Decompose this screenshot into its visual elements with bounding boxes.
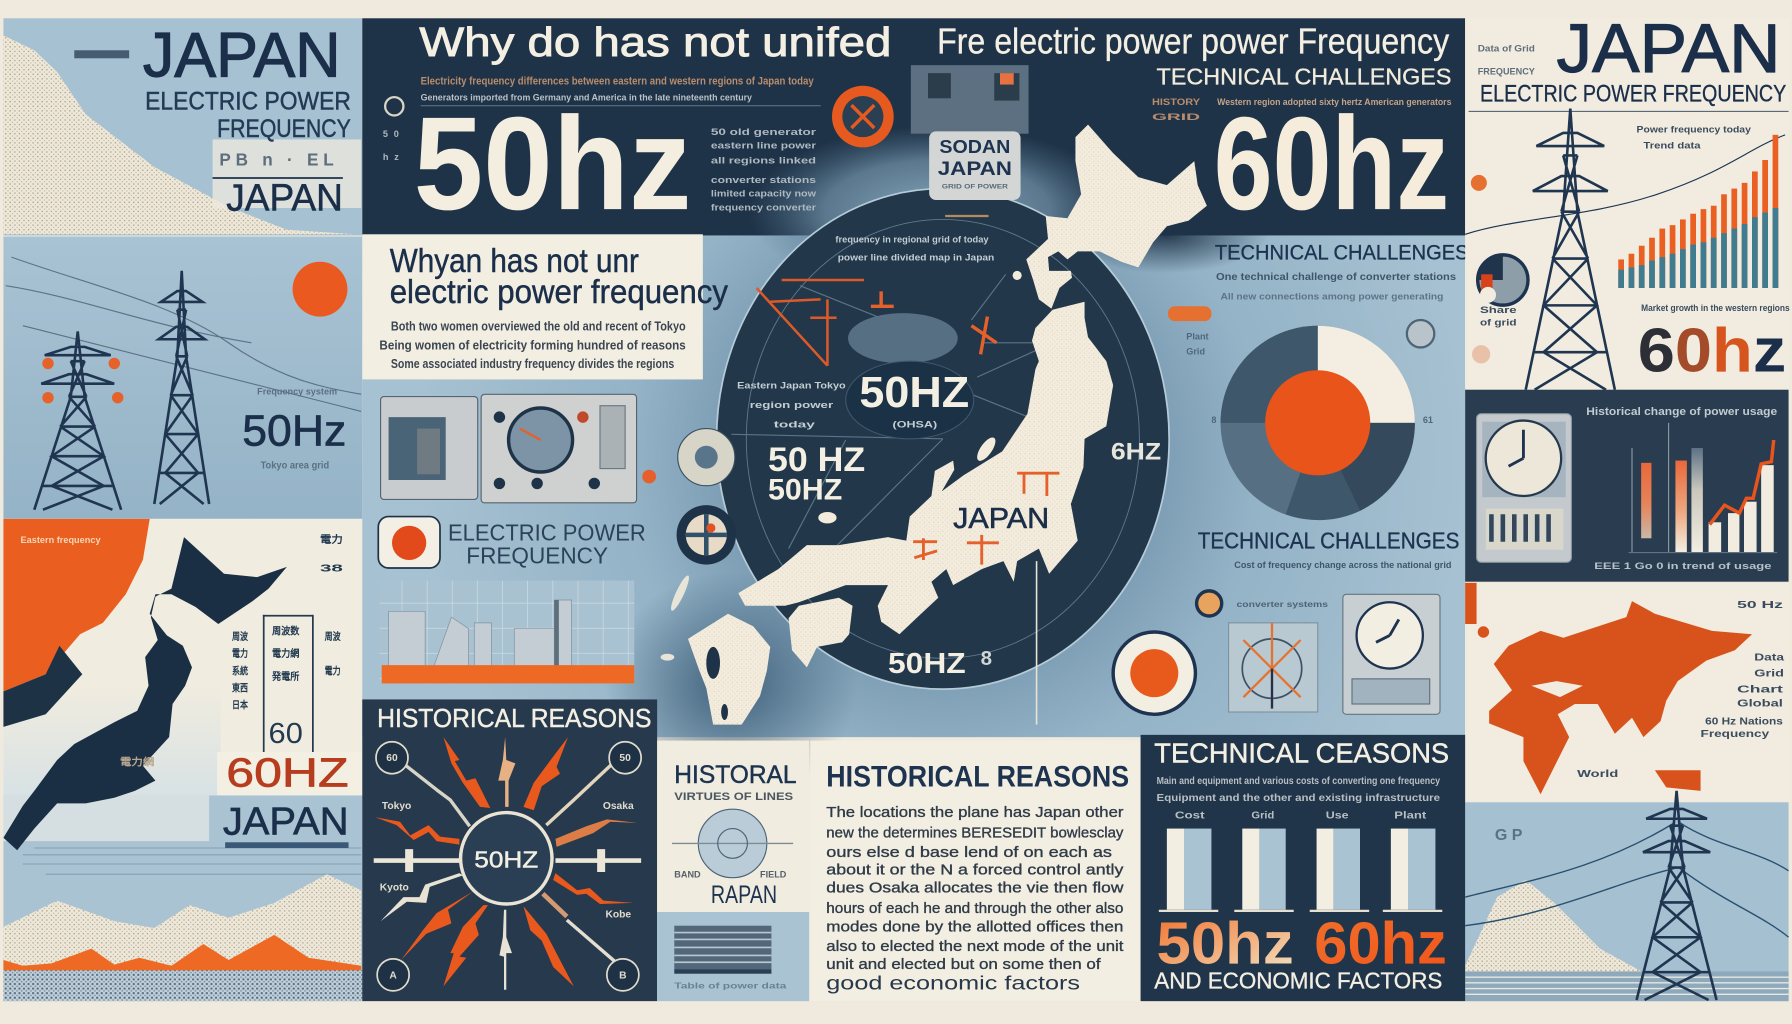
heading: electric power: ELECTRIC POWER — [145, 88, 351, 116]
fine print: One technical challenge of converter stations — [1216, 272, 1456, 283]
body lines: Being women of electricity forming hundred of reasons — [379, 339, 686, 353]
fine print in circle: region power — [750, 400, 834, 410]
small labels around pie: 8 — [1211, 415, 1217, 425]
photo tile — [911, 65, 1029, 134]
vertical text columns: 周波 — [325, 630, 341, 643]
Kyushu — [688, 614, 770, 725]
subheading: technical challenges: TECHNICAL CHALLENGES — [1157, 64, 1451, 90]
side notes: Western region adopted sixty hertz American generators — [1217, 97, 1451, 107]
Shikoku — [789, 598, 853, 667]
big number: 60hz: 60hz — [1314, 909, 1447, 976]
orange network — [757, 280, 864, 366]
panel: dark header band — [362, 18, 1465, 297]
text: JAPAN: JAPAN — [938, 158, 1012, 180]
fine print: Power frequency today — [1637, 125, 1752, 135]
small labels around pie: Plant — [1186, 331, 1209, 341]
heading: HISTORAL — [674, 761, 797, 789]
side notes: hz — [383, 152, 399, 162]
vertical text columns: 東西 — [232, 681, 248, 694]
vertical text columns: 38 — [320, 563, 343, 574]
side notes: frequency converter — [711, 202, 817, 212]
paragraph: unit and elected but on some then of — [826, 957, 1102, 973]
panel: right technical challenges — [1113, 239, 1469, 714]
icon: orange sun — [293, 262, 347, 317]
panel: right technical challenges: Cost of frequency change across the national grid — [1234, 560, 1451, 570]
paragraph: ours else d base lend of on each as — [826, 845, 1112, 861]
side labels: World — [1577, 769, 1618, 780]
panel: right world map — [1465, 583, 1789, 803]
heading second: TECHNICAL CHALLENGES — [1198, 528, 1459, 554]
label: 6HZ: 6HZ — [1111, 438, 1161, 465]
fine print: of grid — [1480, 318, 1517, 328]
panel: historical reasons: 50 — [619, 753, 631, 764]
side labels: Global — [1737, 698, 1783, 709]
panel: bottom-left mountains — [3, 795, 362, 1001]
corner badges — [376, 742, 641, 991]
side labels: 50 Hz — [1737, 600, 1783, 611]
panel: historical reasons — [362, 699, 657, 1001]
paragraph: new the determines BERESEDIT bowlesclay — [826, 826, 1124, 842]
vertical text columns: 電力 — [232, 647, 248, 660]
badge: Sodan Japan: GRID OF POWER — [942, 184, 1008, 191]
panel: right bottom tower and Fuji — [1465, 791, 1789, 1001]
vertical text columns: 日本 — [232, 699, 249, 712]
Honshu — [738, 302, 1113, 634]
icon: clock panel — [1477, 414, 1571, 562]
heading: electric power frequency: FREQUENCY — [466, 542, 608, 568]
orange corner shape — [3, 519, 150, 691]
paragraph: about it or the N a forced control antly — [826, 862, 1124, 878]
panel: historical reasons: B — [619, 970, 627, 981]
body lines: Some associated industry frequency divides the regions — [391, 357, 674, 371]
paragraph: also to elected the next mode of the unit — [826, 939, 1124, 955]
heading line one: Whyan has not unr — [390, 243, 639, 280]
Hokkaido — [1026, 125, 1207, 309]
fine print: Plant — [1394, 810, 1427, 821]
big number: 50hz: 50hz — [414, 90, 691, 238]
chart: rising bars — [1618, 135, 1778, 288]
panel: top-right 60hz tower: Data of Grid — [1478, 43, 1535, 53]
side notes: 50 — [383, 129, 399, 139]
heading: frequency: FREQUENCY — [217, 115, 351, 143]
vertical text columns: 電力網 — [272, 647, 299, 660]
icon: electric machines — [381, 394, 656, 503]
panel: small historical card: BAND — [674, 870, 701, 880]
label: RAPAN: RAPAN — [711, 881, 777, 909]
mountain — [1465, 880, 1646, 974]
paragraph: The locations the plane has Japan other — [826, 805, 1123, 821]
power lines — [1465, 823, 1789, 937]
label: JAPAN: JAPAN — [226, 176, 343, 218]
heading: electric power frequency: ELECTRIC POWER — [448, 520, 646, 546]
vertical text columns: 系統 — [232, 664, 249, 677]
center ellipse detail — [848, 313, 958, 363]
side labels — [1577, 600, 1784, 780]
icon: small ring — [1197, 591, 1222, 616]
chart: grid chart — [379, 581, 634, 683]
center disc — [461, 813, 552, 904]
label: 50Hz: 50Hz — [242, 408, 346, 456]
panel: top-right 60hz tower: FREQUENCY — [1478, 66, 1535, 76]
label: JAPAN map caption: 電力網 — [120, 756, 154, 769]
panel: technical reasons — [1141, 735, 1465, 1001]
vertical text columns: 周波数 — [272, 624, 300, 637]
paragraph: modes done by the allotted offices then — [826, 919, 1123, 935]
big number: 60hz: 60hz — [1638, 316, 1786, 385]
label: 50HZ: 50HZ — [474, 846, 538, 872]
chart: dashboard bars — [1629, 423, 1777, 553]
heading: JAPAN: JAPAN — [143, 21, 341, 91]
label: JAPAN: JAPAN — [223, 800, 349, 843]
panel: central blue backdrop — [362, 195, 1465, 800]
side labels: 60 Hz Nations — [1705, 717, 1783, 728]
panel: small historical card — [657, 741, 809, 912]
big number: 50hz: 50hz — [1157, 909, 1294, 976]
side notes — [383, 97, 1451, 212]
panel: historical reasons: Tokyo — [382, 801, 411, 812]
sea — [3, 970, 362, 1001]
side notes: converter stations — [711, 175, 816, 185]
badge: Sodan Japan — [929, 131, 1021, 200]
paragraph: hours of each he and through the other also — [826, 901, 1123, 917]
fine print: Equipment and the other and existing infrastructure — [1157, 793, 1440, 804]
label: bottom 50HZ: 50HZ — [888, 648, 966, 680]
heading: electric power frequency — [448, 520, 646, 568]
panel: left transmission towers: Tokyo area grid — [261, 461, 329, 472]
bolts — [375, 737, 637, 990]
vertical text columns: 発電所 — [271, 670, 300, 683]
icon: clock box — [1343, 594, 1440, 714]
small labels around pie: Grid — [1186, 346, 1205, 356]
side notes: eastern line power — [711, 141, 817, 151]
text: SODAN: SODAN — [939, 136, 1010, 157]
panel: top-left Japan title: PB n · EL — [219, 150, 334, 170]
panel: historical reasons: Osaka — [603, 801, 634, 812]
side labels: Grid — [1754, 669, 1784, 680]
chart: four bars — [1159, 829, 1442, 911]
icon: fan box — [1229, 623, 1318, 712]
icon: orange gear badge — [832, 86, 894, 147]
panel: right dark dashboard — [1465, 390, 1789, 582]
pill icon — [1168, 306, 1211, 321]
heading: TECHNICAL CHALLENGES — [1215, 239, 1469, 264]
white rays — [374, 765, 641, 963]
icon: tower left — [34, 331, 121, 510]
heading: TECHNICAL CEASONS — [1154, 737, 1449, 768]
side notes: limited capacity now — [711, 189, 817, 199]
title part two: Fre electric power power Frequency — [937, 21, 1450, 62]
panel: bottom-left cream: Eastern frequency — [21, 535, 101, 545]
panel: white intro text box — [362, 234, 728, 379]
label: 60HZ: 60HZ — [226, 749, 349, 795]
fine print: Electricity frequency differences between eastern and western regions of Japan today — [421, 76, 814, 88]
vertical text columns: 周波 — [232, 630, 249, 643]
panel: top-right 60hz tower — [1465, 10, 1790, 390]
fine print — [1480, 125, 1790, 328]
paragraph — [826, 805, 1124, 973]
vertical text columns: 電力 — [325, 664, 341, 677]
mountain illustration — [3, 35, 355, 234]
icon: Japan flag — [378, 517, 440, 568]
fine print: Use — [1326, 810, 1349, 821]
panel: small historical card: FIELD — [760, 870, 787, 880]
fine print — [1157, 776, 1440, 821]
map: Japan archipelago: 8 — [981, 647, 992, 670]
fine print in circle: power line divided map in Japan — [838, 253, 995, 263]
label: JAPAN on map: JAPAN — [953, 503, 1049, 535]
panel: historical reasons: Kobe — [605, 910, 631, 921]
icon: round gauges — [677, 429, 736, 565]
small labels around pie — [1186, 331, 1433, 425]
body lines: Both two women overviewed the old and recent of Tokyo — [391, 319, 686, 333]
icon: small pie — [1478, 255, 1528, 305]
panel: historical reasons: A — [389, 970, 397, 981]
chart: pie — [1221, 326, 1415, 520]
side labels: Frequency — [1701, 729, 1770, 740]
network lines — [731, 274, 1063, 594]
panel: right technical challenges: converter systems — [1237, 600, 1329, 609]
fine print: Trend data — [1643, 141, 1702, 151]
side notes: all regions linked — [711, 155, 816, 165]
panel: left transmission towers: Frequency system — [257, 386, 337, 396]
fine print: Share — [1480, 305, 1517, 315]
heading: HISTORICAL REASONS — [826, 760, 1129, 793]
icon: lattice tower — [1526, 109, 1615, 390]
label: 60: 60 — [269, 718, 303, 750]
panel: small blue table: Table of power data — [674, 982, 787, 991]
panel: historical reasons: 60 — [386, 753, 398, 764]
heading fine print: Historical change of power usage — [1586, 406, 1777, 418]
sea — [1465, 971, 1789, 1001]
panel: bottom-left cream — [3, 519, 362, 795]
label: 50HZ small: 50HZ — [768, 473, 842, 506]
label: 50 HZ large: 50 HZ — [768, 441, 865, 479]
heading: HISTORICAL REASONS — [377, 703, 651, 733]
heading JAPAN: JAPAN — [1557, 10, 1781, 87]
fine print in circle: (OHSA) — [893, 419, 937, 429]
mountains — [3, 874, 361, 966]
map marks — [913, 473, 1059, 565]
panel: historical reasons text — [810, 741, 1141, 1001]
orange ridge line — [3, 935, 361, 974]
fine print: Main and equipment and various costs of converting one frequency — [1157, 776, 1440, 787]
closing line: good economic factors — [826, 973, 1080, 995]
icon: circular dial — [698, 809, 767, 878]
map: orange world — [1465, 583, 1752, 794]
panel: small historical card: VIRTUES OF LINES — [674, 791, 794, 803]
big number: 60hz: 60hz — [1214, 90, 1449, 238]
fine print in circle — [737, 234, 995, 429]
panel: small blue table — [657, 912, 809, 1001]
panel: right bottom tower and Fuji: G P — [1495, 827, 1523, 844]
small labels around pie: 61 — [1423, 415, 1433, 425]
panel: radial dark map circle — [717, 189, 1169, 689]
panel: dark header band: Generators imported from Germany and America in the late nineteenth century — [421, 93, 753, 103]
paragraph: dues Osaka allocates the vie then flow — [826, 881, 1124, 897]
fine print: Cost — [1175, 810, 1205, 821]
title part one: Why do has not unifed — [419, 19, 891, 65]
side notes: GRID — [1152, 112, 1201, 122]
side notes: 50 old generator — [711, 127, 817, 137]
vertical text columns: 電力 — [320, 533, 343, 546]
fine print in circle: Eastern Japan Tokyo — [737, 381, 846, 391]
side labels: Data — [1754, 653, 1784, 664]
icon: tower right — [154, 271, 209, 504]
panel: top-left Japan title — [3, 18, 362, 235]
fine print in circle: frequency in regional grid of today — [835, 234, 990, 244]
panel: left transmission towers — [3, 237, 362, 519]
icon: tower — [1637, 791, 1717, 1000]
fine print: EEE 1 Go 0 in trend of usage — [1594, 561, 1771, 571]
vertical text columns — [232, 533, 343, 712]
panel: historical reasons: Kyoto — [380, 882, 409, 893]
small islands — [1013, 271, 1022, 280]
map: Japan archipelago — [661, 125, 1207, 725]
side notes: HISTORY — [1152, 97, 1200, 107]
label: central 50HZ: 50HZ — [859, 369, 969, 417]
panel: right technical challenges: All new connections among power generating — [1221, 291, 1443, 301]
side labels: Chart — [1737, 685, 1784, 696]
heading line two: electric power frequency — [390, 274, 728, 311]
fine print in circle: today — [774, 419, 816, 429]
fine print: Grid — [1251, 810, 1274, 821]
body lines — [379, 319, 686, 371]
icon: sun ring — [1113, 632, 1195, 714]
caption: AND ECONOMIC FACTORS — [1154, 968, 1442, 994]
map: dark Japan — [3, 537, 287, 850]
